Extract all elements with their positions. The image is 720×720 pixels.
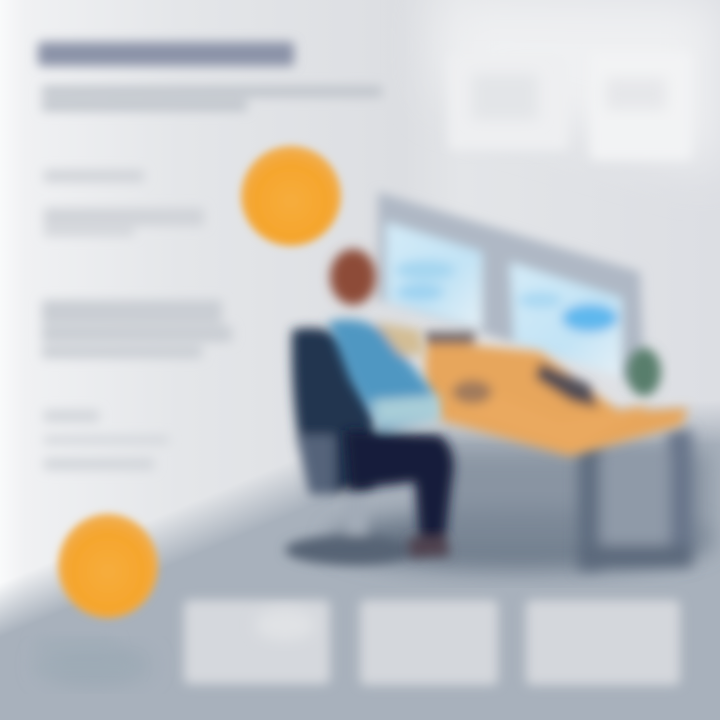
text block: second list item bbox=[42, 300, 232, 358]
chair bbox=[285, 328, 415, 565]
floor bbox=[0, 386, 720, 720]
plant bbox=[627, 348, 661, 396]
panel: bottom card 2 bbox=[360, 600, 498, 685]
illustration: person at desk bbox=[285, 192, 692, 570]
body bbox=[328, 320, 454, 558]
panel: bottom card 3 bbox=[526, 600, 680, 685]
icon: orange circle lower bbox=[58, 514, 158, 618]
top right panels bbox=[448, 52, 692, 160]
panel: bottom card 1 bbox=[184, 600, 330, 684]
icon: orange circle upper bbox=[241, 146, 341, 246]
footer text bbox=[35, 640, 135, 672]
desk top bbox=[425, 332, 688, 456]
text block: first list item bbox=[44, 170, 204, 236]
monitors bbox=[378, 192, 645, 385]
bottom panels bbox=[184, 600, 680, 685]
panel: top card right bbox=[590, 52, 692, 160]
panel: top card left bbox=[448, 54, 568, 150]
heading bbox=[38, 42, 294, 66]
desk legs bbox=[578, 430, 692, 570]
text block: third list item bbox=[44, 410, 169, 470]
subheading bbox=[42, 86, 382, 111]
head bbox=[330, 249, 376, 305]
